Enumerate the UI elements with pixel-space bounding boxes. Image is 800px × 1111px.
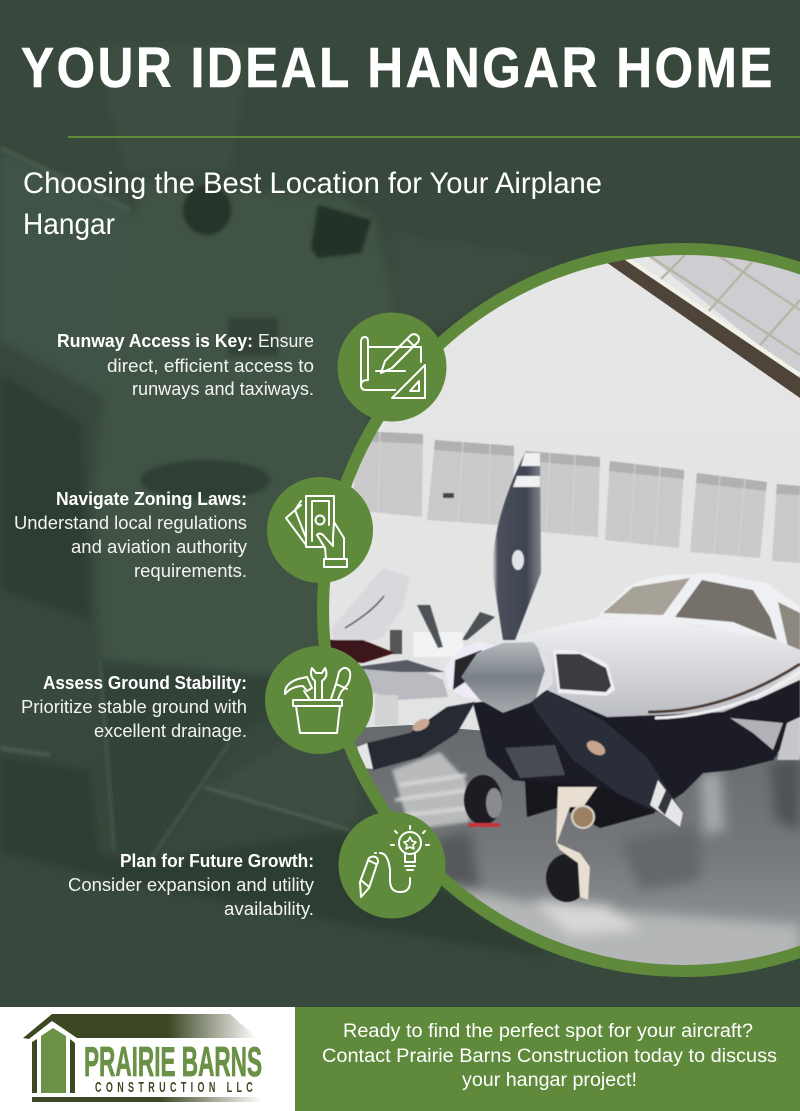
photo: aircraft in hangar xyxy=(320,250,800,985)
ceiling skylight xyxy=(606,250,800,398)
text block: ground stability: Prioritize stable ground with xyxy=(21,696,247,717)
text block: future growth: Consider expansion and utility xyxy=(68,874,315,895)
text block: zoning laws: Navigate Zoning Laws: xyxy=(56,488,247,509)
text block: zoning laws: Understand local regulations xyxy=(14,512,247,533)
logo: Prairie Barns: PRAIRIE BARNS xyxy=(84,1038,262,1085)
icon: pencil and light bulb xyxy=(338,812,446,918)
text block: runway access: runways and taxiways. xyxy=(132,378,314,399)
text block: future growth: availability. xyxy=(224,898,314,919)
text block: zoning laws: requirements. xyxy=(134,560,247,581)
text block: future growth xyxy=(68,850,315,919)
text block: zoning laws xyxy=(14,488,248,581)
footer logo panel xyxy=(0,1007,295,1111)
footer call to action: Ready to find the perfect spot for your aircraft? xyxy=(343,1021,753,1042)
main aircraft fuselage xyxy=(445,573,800,813)
icon: hand holding money xyxy=(267,477,373,583)
text block: runway access: Ensure xyxy=(258,330,314,351)
text block: runway access: Runway Access is Key: xyxy=(57,330,253,351)
logo: Prairie Barns xyxy=(23,1014,262,1102)
subtitle: Choosing the Best Location for Your Airplane xyxy=(23,167,602,200)
propeller xyxy=(357,453,683,827)
icon: tool bucket xyxy=(265,646,373,754)
hangar floor xyxy=(354,725,800,948)
text block: future growth: Plan for Future Growth: xyxy=(120,850,314,871)
footer call to action: Contact Prairie Barns Construction today to discuss xyxy=(322,1046,777,1067)
footer call to action: your hangar project! xyxy=(462,1070,637,1091)
text block: ground stability xyxy=(21,672,247,741)
text block: runway access: direct, efficient access to xyxy=(107,355,314,376)
floor reflections xyxy=(392,752,800,985)
icon: blueprint, pencil and set square xyxy=(338,312,446,422)
subtitle: Hangar xyxy=(23,208,115,241)
text block: ground stability: Assess Ground Stability: xyxy=(43,672,247,693)
decorative green ring around photo xyxy=(323,249,800,971)
footer call to action xyxy=(295,1007,800,1111)
text block: zoning laws: and aviation authority xyxy=(71,536,248,557)
subtitle xyxy=(23,167,602,241)
hangar windows xyxy=(352,431,800,563)
background aircraft tail and nacelle xyxy=(325,568,495,725)
logo: Prairie Barns: CONSTRUCTION LLC xyxy=(95,1079,253,1096)
text block: runway access xyxy=(57,330,314,399)
text block: ground stability: excellent drainage. xyxy=(94,720,247,741)
intakes xyxy=(553,650,615,696)
nose gear and wheels xyxy=(464,775,655,902)
